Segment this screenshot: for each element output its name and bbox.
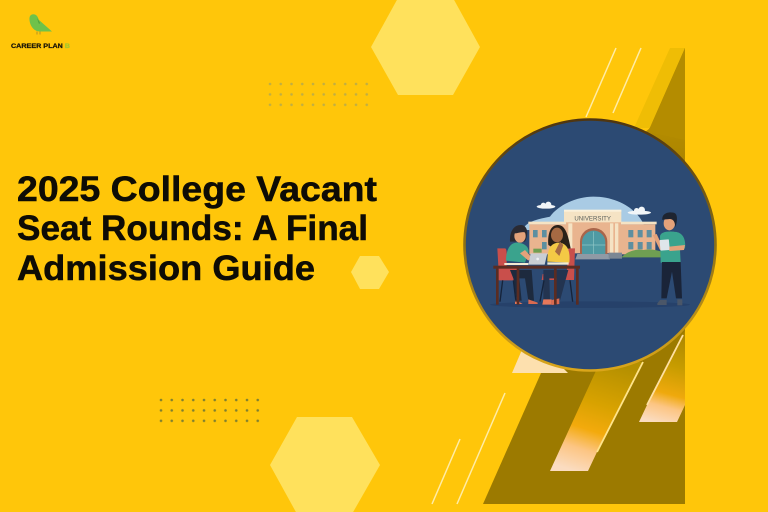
thin stripe highlights [597, 335, 683, 452]
peach wedge [512, 345, 568, 373]
chairs [497, 248, 575, 280]
title: Seat Rounds: A Final [17, 209, 368, 248]
university building [528, 210, 662, 259]
dark triangle base [483, 48, 685, 504]
gradient stripe left [550, 362, 643, 471]
circle panel [464, 120, 716, 370]
upper light band [634, 48, 685, 128]
table [493, 266, 580, 305]
title: 2025 College Vacant [17, 170, 377, 209]
ground shadow [490, 301, 690, 308]
decorative angular shapes [432, 48, 685, 504]
hexagon: bottom [270, 417, 380, 512]
student middle [542, 225, 571, 305]
illustration: university and students [490, 197, 690, 308]
sky dome [523, 197, 644, 230]
student right [653, 212, 685, 305]
student left [506, 225, 538, 304]
logo wordmark: CAREER PLAN B [11, 43, 70, 50]
title: Admission Guide [17, 249, 315, 288]
logo: Career Plan B [11, 14, 70, 50]
hexagon: small middle [351, 256, 389, 289]
gradient stripe right [639, 330, 685, 422]
thin light lines [432, 48, 641, 504]
dot grid: top [265, 79, 372, 110]
hexagon: top [371, 0, 480, 95]
building sign: UNIVERSITY [574, 216, 611, 222]
dot grid: bottom [156, 395, 264, 426]
upper darker band [600, 48, 685, 170]
title [17, 170, 377, 288]
icon: green bird [29, 14, 52, 35]
laptop and books [504, 253, 569, 265]
clouds [537, 202, 651, 215]
